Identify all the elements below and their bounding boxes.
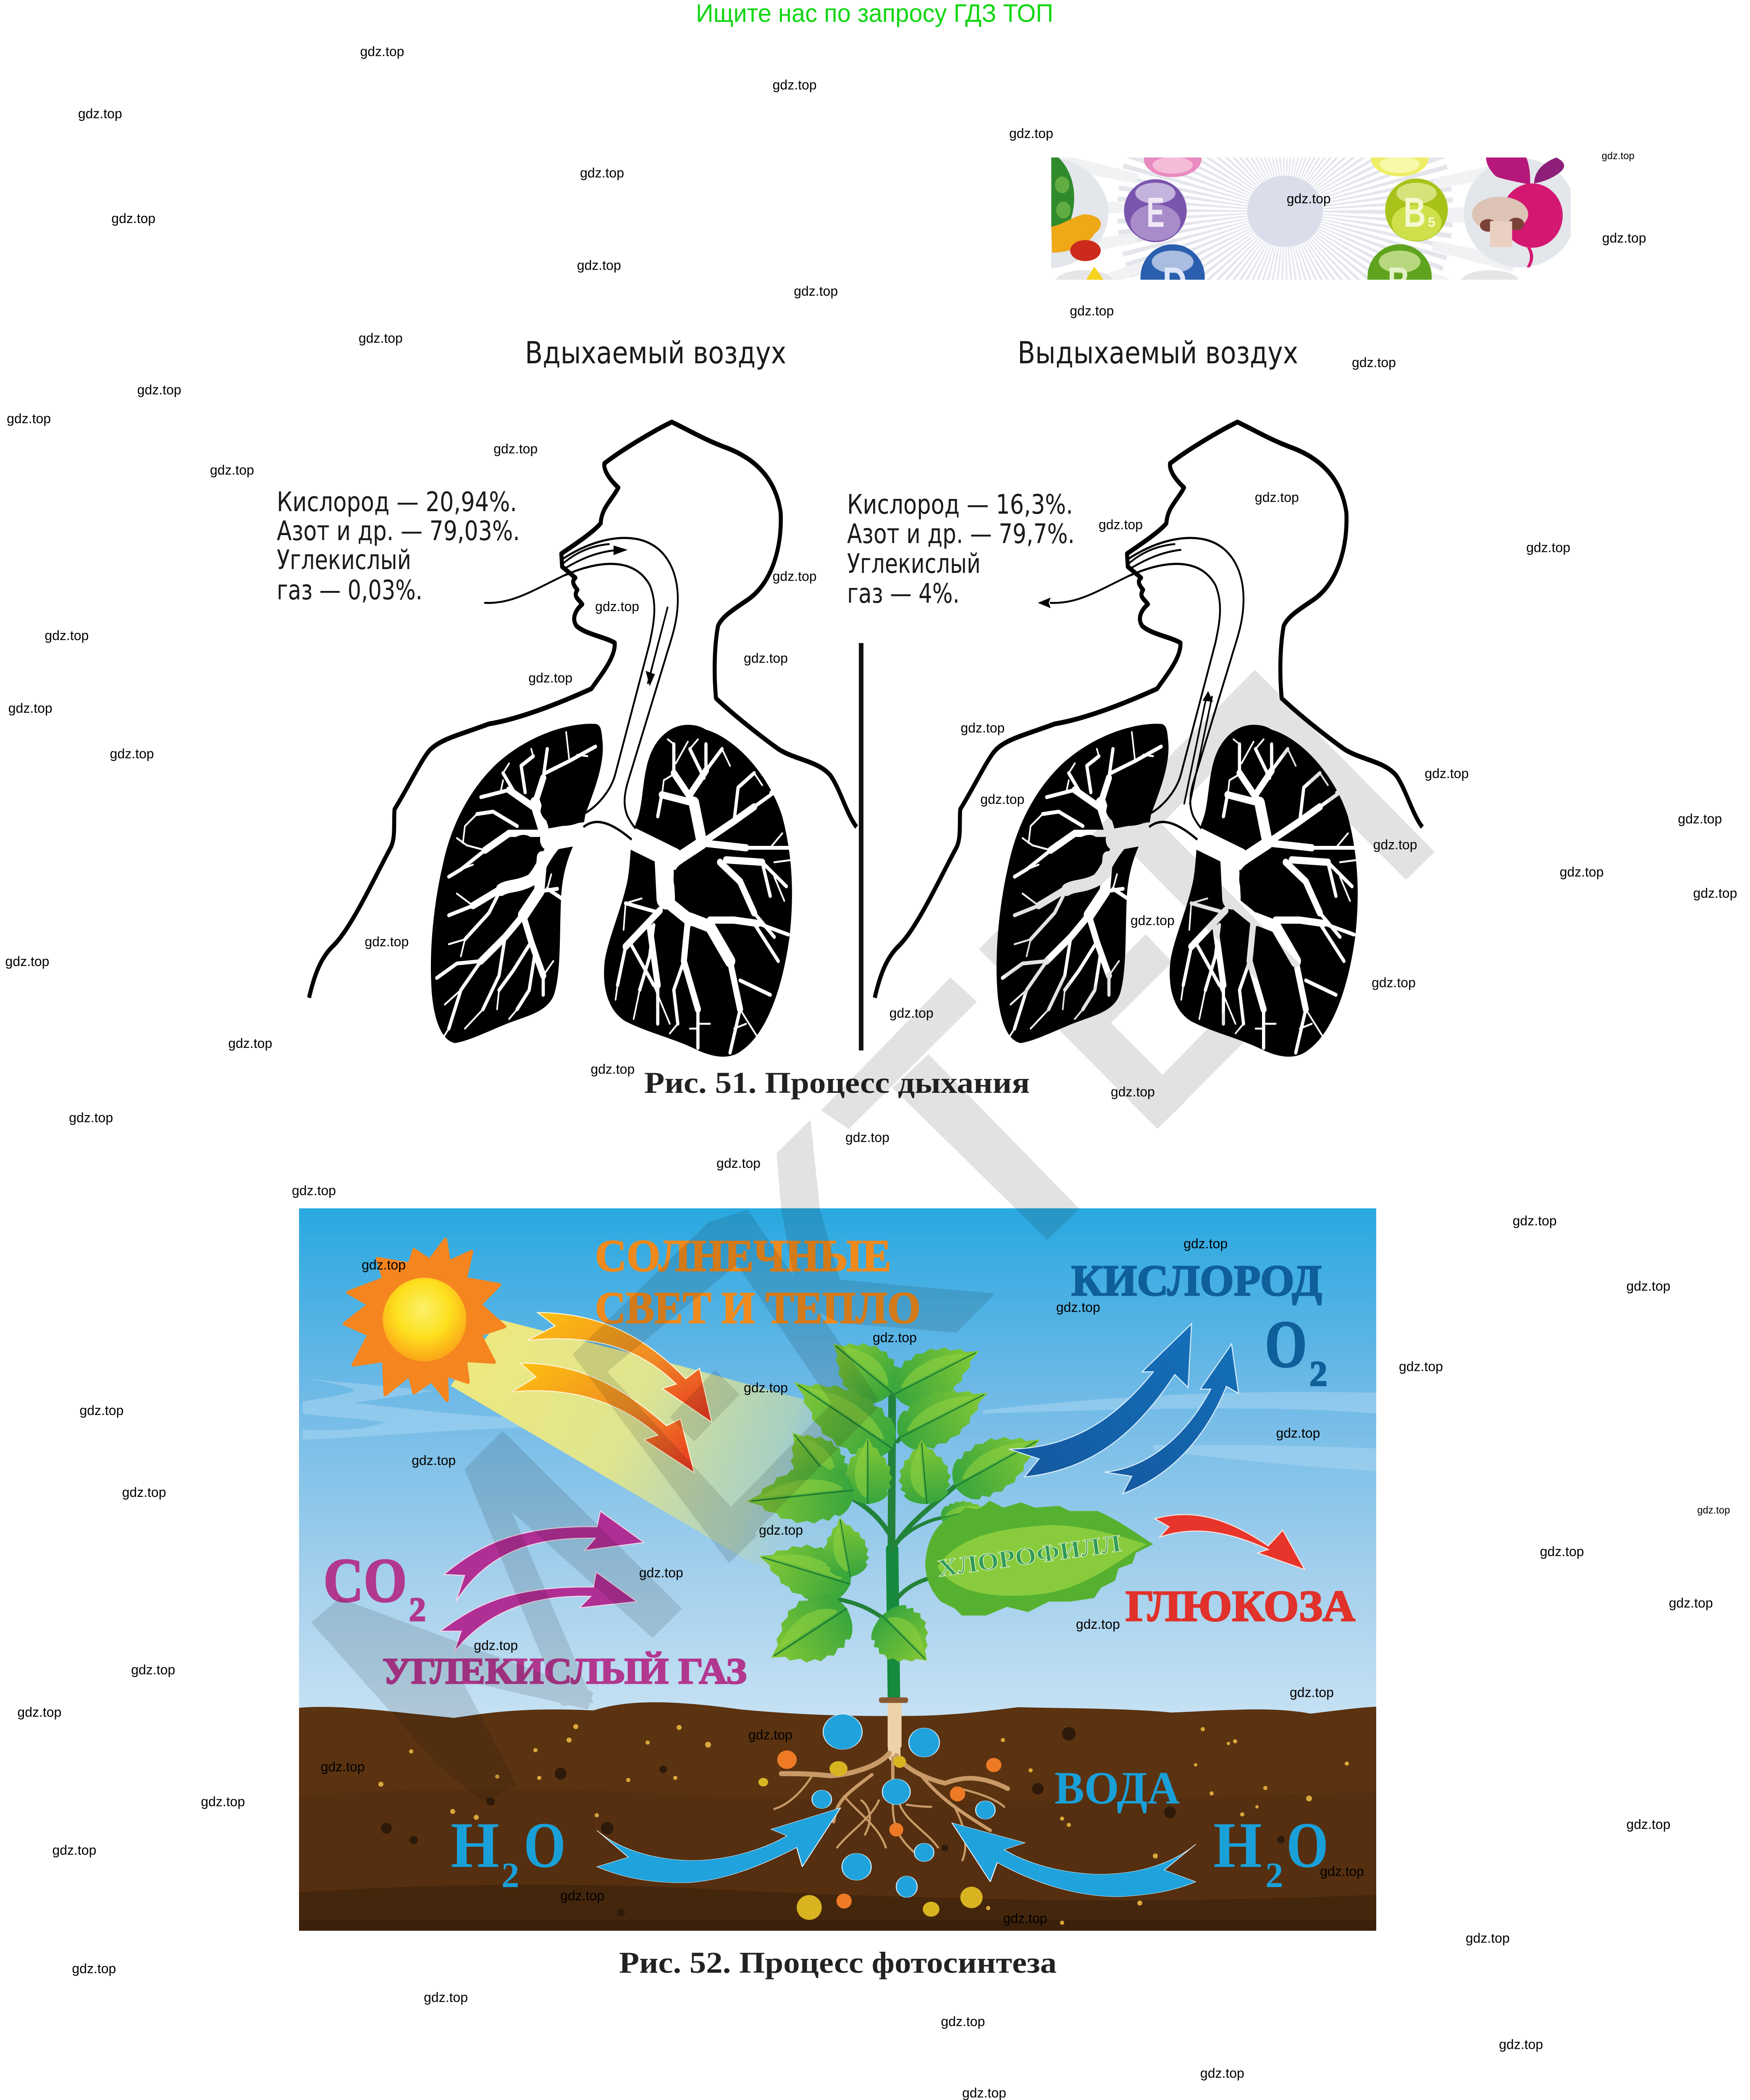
label: sunlight and heat: СВЕТ И ТЕПЛО xyxy=(595,1283,921,1333)
scattered gdz.top site marks: gdz.top xyxy=(8,701,52,716)
arrows: oxygen and glucose xyxy=(1009,1324,1305,1570)
sun beam xyxy=(451,1320,868,1584)
roots xyxy=(774,1702,1007,1860)
scattered gdz.top site marks: gdz.top xyxy=(79,1403,123,1418)
heading: inhaled air: Вдыхаемый воздух xyxy=(525,335,786,370)
diagram: inhalation figure with lungs xyxy=(309,422,857,1057)
scattered gdz.top site marks: gdz.top xyxy=(201,1794,245,1809)
scattered gdz.top site marks: gdz.top xyxy=(590,1062,635,1077)
scattered gdz.top site marks: gdz.top xyxy=(560,1888,604,1903)
scattered gdz.top site marks: gdz.top xyxy=(744,651,788,666)
label: H2O right: 2 xyxy=(1265,1856,1283,1895)
scattered gdz.top site marks: gdz.top xyxy=(1131,913,1175,928)
scattered gdz.top site marks: gdz.top xyxy=(1678,811,1722,827)
chlorophyll leaf xyxy=(925,1501,1153,1616)
text block: exhaled air composition xyxy=(847,489,1075,609)
scattered gdz.top site marks: gdz.top xyxy=(72,1961,116,1976)
scattered gdz.top site marks: gdz.top xyxy=(744,1380,788,1395)
text block: inhaled air composition: Кислород — 20,94%. xyxy=(277,487,517,518)
scattered gdz.top site marks: gdz.top xyxy=(45,628,89,643)
scattered gdz.top site marks: gdz.top xyxy=(228,1036,272,1051)
scattered gdz.top site marks: gdz.top xyxy=(773,569,817,584)
scattered gdz.top site marks: gdz.top xyxy=(1290,1685,1334,1700)
text block: exhaled air composition: газ — 4%. xyxy=(847,578,960,609)
scattered gdz.top site marks: gdz.top xyxy=(1003,1911,1047,1926)
scattered gdz.top site marks: gdz.top xyxy=(773,77,817,92)
scattered gdz.top site marks: gdz.top xyxy=(1627,1817,1671,1832)
sun xyxy=(344,1239,505,1400)
scattered gdz.top site marks: gdz.top xyxy=(759,1522,803,1538)
scattered gdz.top site marks: gdz.top xyxy=(137,382,181,397)
scattered gdz.top site marks: gdz.top xyxy=(1099,517,1143,532)
scattered gdz.top site marks: gdz.top xyxy=(1466,1931,1510,1946)
scattered gdz.top site marks: gdz.top xyxy=(1056,1299,1100,1315)
arrows: carbon dioxide xyxy=(443,1511,644,1601)
label: H2O left: O xyxy=(524,1809,566,1881)
scattered gdz.top site marks: gdz.top xyxy=(52,1843,96,1858)
scattered gdz.top site marks: gdz.top xyxy=(362,1257,406,1272)
scattered gdz.top site marks: gdz.top xyxy=(493,441,538,457)
plant xyxy=(743,1322,1153,1747)
image: vitamins strip: B xyxy=(1404,189,1426,236)
label: H2O left: 2 xyxy=(501,1856,519,1895)
scattered gdz.top site marks: gdz.top xyxy=(595,599,639,614)
scattered gdz.top site marks: gdz.top xyxy=(528,670,572,685)
scattered gdz.top site marks: gdz.top xyxy=(1070,303,1114,318)
soil xyxy=(294,1702,1380,1933)
caption: figure 51: Рис. 51. Процесс дыхания xyxy=(644,1066,1030,1100)
leaves xyxy=(815,1322,910,1415)
label: H2O left: H xyxy=(451,1809,499,1881)
soil specks xyxy=(378,1724,1349,1925)
scattered gdz.top site marks: gdz.top xyxy=(639,1565,683,1580)
image: vitamins strip: B xyxy=(1388,259,1410,306)
text block: exhaled air composition: Кислород — 16,3%. xyxy=(847,489,1073,520)
text block: inhaled air composition: Углекислый xyxy=(277,545,411,576)
water droplets and minerals xyxy=(758,1714,1002,1920)
scattered gdz.top site marks: gdz.top xyxy=(873,1330,917,1345)
scattered gdz.top site marks: gdz.top xyxy=(1373,837,1417,852)
label: sunlight and heat: СОЛНЕЧНЫЕ xyxy=(595,1231,891,1281)
scattered gdz.top site marks: gdz.top xyxy=(1352,355,1396,370)
label: oxygen xyxy=(1071,1256,1327,1394)
scattered gdz.top site marks: gdz.top xyxy=(580,165,624,180)
text block: inhaled air composition: Азот и др. — 79,03%. xyxy=(277,516,520,547)
scattered gdz.top site marks: gdz.top xyxy=(845,1130,889,1145)
scattered gdz.top site marks: gdz.top xyxy=(1602,231,1646,246)
scattered gdz.top site marks: gdz.top xyxy=(69,1110,113,1125)
text block: inhaled air composition: газ — 0,03%. xyxy=(277,575,422,606)
image: photosynthesis scene xyxy=(294,1208,1380,1933)
clouds xyxy=(303,1379,1376,1471)
scattered gdz.top site marks: gdz.top xyxy=(424,1990,468,2005)
scattered gdz.top site marks: gdz.top xyxy=(1499,2037,1543,2052)
caption: figure 52: Рис. 52. Процесс фотосинтеза xyxy=(619,1946,1057,1979)
label: glucose: ГЛЮКОЗА xyxy=(1126,1581,1355,1630)
scattered gdz.top site marks: gdz.top xyxy=(365,934,409,949)
scattered gdz.top site marks: gdz.top xyxy=(110,746,154,761)
divider line xyxy=(859,643,863,1050)
sky xyxy=(299,1208,1376,1725)
image: vitamins strip: E xyxy=(1147,189,1165,236)
scattered gdz.top site marks: gdz.top xyxy=(1076,1617,1120,1632)
scattered gdz.top site marks: gdz.top xyxy=(360,44,404,59)
scattered gdz.top site marks: gdz.top xyxy=(1200,2066,1244,2081)
label: carbon dioxide formula: 2 xyxy=(409,1591,426,1628)
label: oxygen: 2 xyxy=(1309,1354,1327,1394)
scattered gdz.top site marks: gdz.top xyxy=(1009,126,1053,141)
image: vitamins strip xyxy=(1051,158,1571,280)
scattered gdz.top site marks: gdz.top xyxy=(1693,886,1737,901)
scattered gdz.top site marks: gdz.top xyxy=(980,792,1024,807)
text block: exhaled air composition: Азот и др. — 79,7%. xyxy=(847,519,1075,550)
scattered gdz.top site marks: gdz.top xyxy=(111,211,155,226)
scattered gdz.top site marks: gdz.top xyxy=(1183,1236,1228,1251)
scattered gdz.top site marks: gdz.top xyxy=(359,331,403,346)
watermark: large diagonal grey letters xyxy=(311,670,1435,1802)
label: H2O right xyxy=(1213,1809,1328,1895)
scattered gdz.top site marks: gdz.top xyxy=(960,720,1005,735)
scattered gdz.top site marks: gdz.top xyxy=(1425,766,1469,781)
arrows: sunlight xyxy=(527,1312,712,1422)
scattered gdz.top site marks: gdz.top xyxy=(1287,191,1331,206)
image: vitamins strip: 5 xyxy=(1428,215,1435,230)
label: H2O left xyxy=(451,1809,566,1895)
label: carbon dioxide: УГЛЕКИСЛЫЙ ГАЗ xyxy=(383,1651,747,1692)
collar xyxy=(879,1697,908,1703)
label: oxygen: O xyxy=(1265,1307,1307,1381)
scattered gdz.top site marks: gdz.top xyxy=(1602,150,1635,162)
scattered gdz.top site marks: gdz.top xyxy=(474,1638,518,1653)
scattered gdz.top site marks: gdz.top xyxy=(1540,1544,1584,1559)
scattered gdz.top site marks: gdz.top xyxy=(577,258,621,273)
arrows: water xyxy=(597,1808,1196,1897)
scattered gdz.top site marks: gdz.top xyxy=(941,2014,985,2029)
text block: inhaled air composition xyxy=(277,487,520,606)
scattered gdz.top site marks: gdz.top xyxy=(321,1759,365,1774)
top banner text: Ищите нас по запросу ГДЗ ТОП xyxy=(696,0,1053,27)
scattered gdz.top site marks: gdz.top xyxy=(1513,1213,1557,1228)
scattered gdz.top site marks: gdz.top xyxy=(1320,1864,1364,1879)
heading: exhaled air: Выдыхаемый воздух xyxy=(1018,335,1298,370)
scattered gdz.top site marks: gdz.top xyxy=(122,1485,166,1500)
label: sunlight and heat xyxy=(595,1231,921,1333)
scattered gdz.top site marks: gdz.top xyxy=(962,2085,1006,2100)
label: oxygen: КИСЛОРОД xyxy=(1071,1256,1322,1305)
scattered gdz.top site marks: gdz.top xyxy=(889,1005,934,1021)
text block: exhaled air composition: Углекислый xyxy=(847,549,981,580)
label: chlorophyll: ХЛОРОФИЛЛ xyxy=(936,1529,1123,1582)
scattered gdz.top site marks: gdz.top xyxy=(1399,1359,1443,1374)
label: water: ВОДА xyxy=(1055,1762,1180,1814)
image: vitamins strip: D xyxy=(1162,259,1187,306)
scattered gdz.top site marks: gdz.top xyxy=(78,106,122,121)
scattered gdz.top site marks: gdz.top xyxy=(1276,1425,1320,1441)
scattered gdz.top site marks: gdz.top xyxy=(7,411,51,426)
scattered gdz.top site marks: gdz.top xyxy=(794,284,838,299)
scattered gdz.top site marks: gdz.top xyxy=(1697,1505,1730,1516)
diagram: exhalation figure with lungs xyxy=(875,422,1422,1057)
scattered gdz.top site marks: gdz.top xyxy=(1255,490,1299,505)
scattered gdz.top site marks: gdz.top xyxy=(1111,1084,1155,1100)
scattered gdz.top site marks: gdz.top xyxy=(1526,540,1570,555)
scattered gdz.top site marks: gdz.top xyxy=(1560,864,1604,879)
scattered gdz.top site marks: gdz.top xyxy=(1669,1596,1713,1611)
label: H2O right: H xyxy=(1213,1809,1262,1881)
scattered gdz.top site marks: gdz.top xyxy=(716,1155,761,1171)
scattered gdz.top site marks: gdz.top xyxy=(292,1183,336,1198)
scattered gdz.top site marks: gdz.top xyxy=(17,1705,61,1720)
scattered gdz.top site marks: gdz.top xyxy=(1627,1278,1671,1294)
label: H2O right: O xyxy=(1286,1809,1328,1881)
scattered gdz.top site marks: gdz.top xyxy=(748,1727,792,1743)
label: carbon dioxide formula: CO xyxy=(323,1546,407,1615)
scattered gdz.top site marks: gdz.top xyxy=(1372,975,1416,990)
scattered gdz.top site marks: gdz.top xyxy=(131,1662,175,1677)
scattered gdz.top site marks: gdz.top xyxy=(210,462,254,478)
scattered gdz.top site marks: gdz.top xyxy=(412,1453,456,1468)
scattered gdz.top site marks: gdz.top xyxy=(5,954,49,969)
